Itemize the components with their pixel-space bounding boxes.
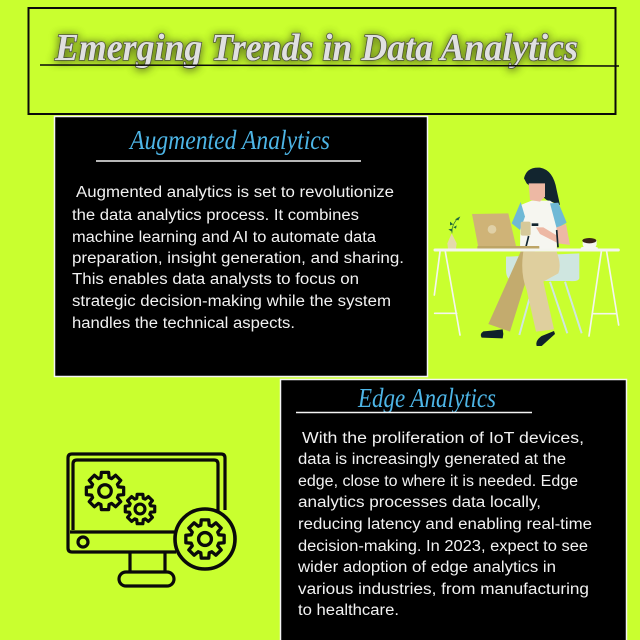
text block: edge analytics description: edge, close to where it is needed. Edge [298,473,578,490]
text block: edge analytics description: to healthcare. [298,602,399,619]
text block: augmented analytics description: Augmented analytics is set to revolutionize [76,184,394,201]
panel: augmented analytics [54,116,428,376]
torso [520,201,558,250]
text block: augmented analytics description: machine learning and AI to automate data [72,229,376,246]
gear: large [86,472,124,510]
text block: augmented analytics description: strategic decision-making while the system [72,293,391,310]
cup [521,222,531,236]
monitor body [68,454,225,552]
text block: edge analytics description: wider adoption of edge analytics in [297,559,556,576]
desk [434,250,619,336]
text block: augmented analytics description: the data analytics process. It combines [72,207,359,224]
text block: edge analytics description: various industries, from manufacturing [298,581,589,598]
icon: monitor with gears [68,454,235,586]
heading: edge analytics: Edge Analytics [357,383,496,413]
text block: edge analytics description: data is increasingly generated at the [298,451,566,468]
monitor stand [130,553,165,572]
badge circle [175,509,235,569]
gear: small [125,494,155,524]
coffee cup [581,238,598,250]
plant in vase [447,216,460,249]
heading: augmented analytics: Augmented Analytics [128,125,330,155]
back leg [488,252,535,332]
illustration: woman working at desk with laptop [434,168,619,346]
text block: edge analytics description: With the proliferation of IoT devices, [302,430,584,447]
text block: edge analytics description: analytics processes data locally, [298,494,541,511]
text block: augmented analytics description: preparation, insight generation, and sharing. [72,250,404,267]
text block: augmented analytics description: handles the technical aspects. [72,315,295,332]
feet [481,329,503,338]
bag strap [526,230,558,247]
gear: badge [186,520,224,558]
text block: augmented analytics description: This enables data analysts to focus on [72,271,359,288]
front leg [522,252,560,332]
text block: edge analytics description: decision-making. In 2023, expect to see [298,538,588,555]
text block: edge analytics description [297,430,592,619]
laptop [472,213,539,249]
text block: augmented analytics description [72,184,404,332]
sleeves [512,202,525,230]
text block: edge analytics description: reducing latency and enabling real-time [298,516,592,533]
arm [536,224,570,245]
face [529,183,545,202]
title: Emerging Trends in Data Analytics [54,27,578,69]
title banner [28,8,619,114]
panel: edge analytics [280,380,626,640]
hair back [524,168,560,205]
chair [506,253,582,335]
